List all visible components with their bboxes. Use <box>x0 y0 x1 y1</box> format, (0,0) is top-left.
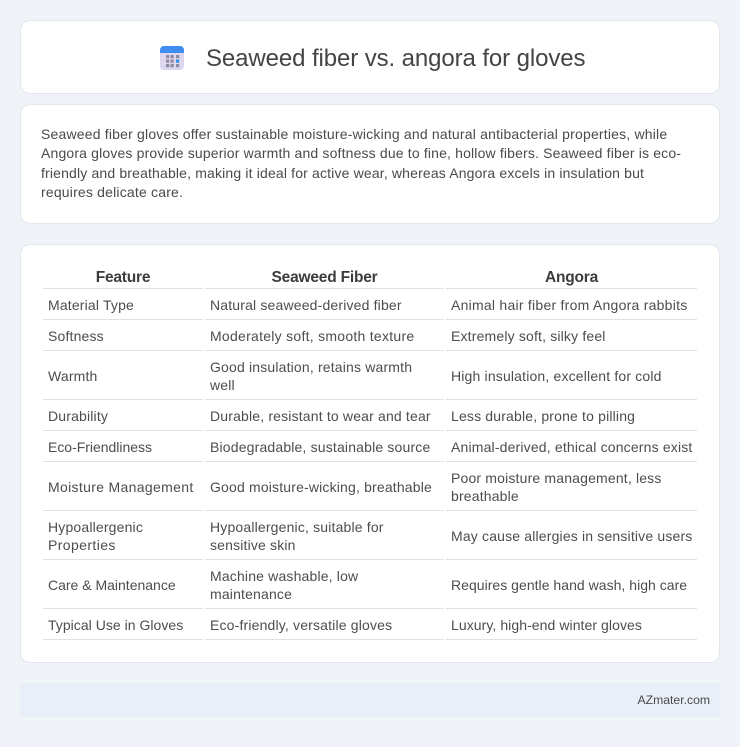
comparison table: Eco-Friendliness <box>48 439 152 455</box>
comparison table: sensitive skin <box>210 537 296 553</box>
comparison table: Softness <box>48 328 104 344</box>
comparison table: Moisture Management <box>48 479 194 495</box>
comparison table: High insulation, excellent for cold <box>451 368 662 384</box>
comparison table: well <box>210 377 235 393</box>
comparison table: Less durable, prone to pilling <box>451 408 635 424</box>
comparison table: Good moisture-wicking, breathable <box>210 479 432 495</box>
comparison table: May cause allergies in sensitive users <box>451 528 692 544</box>
panel: title card <box>20 20 720 94</box>
title: Seaweed fiber vs. angora for gloves <box>206 45 585 72</box>
comparison table: Seaweed Fiber <box>272 269 377 286</box>
panel: comparison table card <box>20 244 720 663</box>
text block: introduction: requires delicate care. <box>41 184 183 200</box>
comparison table: Natural seaweed-derived fiber <box>210 297 402 313</box>
comparison table: maintenance <box>210 586 292 602</box>
comparison table: Typical Use in Gloves <box>48 617 183 633</box>
comparison table: Poor moisture management, less <box>451 470 662 486</box>
comparison table: Good insulation, retains warmth <box>210 359 412 375</box>
footer: source credit <box>20 683 720 717</box>
comparison table: Requires gentle hand wash, high care <box>451 577 687 593</box>
comparison table: Feature <box>96 269 150 286</box>
comparison table: Biodegradable, sustainable source <box>210 439 430 455</box>
text block: introduction: Angora gloves provide superior warmth and softness due to fine, hollow fibers. Seaweed fiber is eco- <box>41 145 681 161</box>
panel: intro card <box>20 104 720 224</box>
comparison table: Durability <box>48 408 108 424</box>
comparison table <box>43 269 697 640</box>
icon: calendar <box>160 46 184 70</box>
comparison table: Angora <box>545 269 598 286</box>
comparison table: Animal hair fiber from Angora rabbits <box>451 297 687 313</box>
comparison table: Luxury, high-end winter gloves <box>451 617 642 633</box>
comparison table: Hypoallergenic <box>48 519 143 535</box>
text block: introduction: friendly and breathable, making it ideal for active wear, whereas Angora excels in insulation but <box>41 165 644 181</box>
footer: source credit: AZmater.com <box>638 693 710 707</box>
comparison table: Hypoallergenic, suitable for <box>210 519 384 535</box>
text block: introduction: Seaweed fiber gloves offer sustainable moisture-wicking and natural antibacterial properties, while <box>41 126 667 142</box>
comparison table: Care & Maintenance <box>48 577 176 593</box>
comparison table: Animal-derived, ethical concerns exist <box>451 439 692 455</box>
comparison table: Eco-friendly, versatile gloves <box>210 617 392 633</box>
comparison table: breathable <box>451 488 519 504</box>
comparison table: Machine washable, low <box>210 568 358 584</box>
comparison table: Extremely soft, silky feel <box>451 328 606 344</box>
text block: introduction <box>41 126 681 200</box>
comparison table: Material Type <box>48 297 134 313</box>
comparison table: Durable, resistant to wear and tear <box>210 408 431 424</box>
comparison table: Warmth <box>48 368 98 384</box>
comparison table: Properties <box>48 537 116 553</box>
comparison table: Moderately soft, smooth texture <box>210 328 414 344</box>
